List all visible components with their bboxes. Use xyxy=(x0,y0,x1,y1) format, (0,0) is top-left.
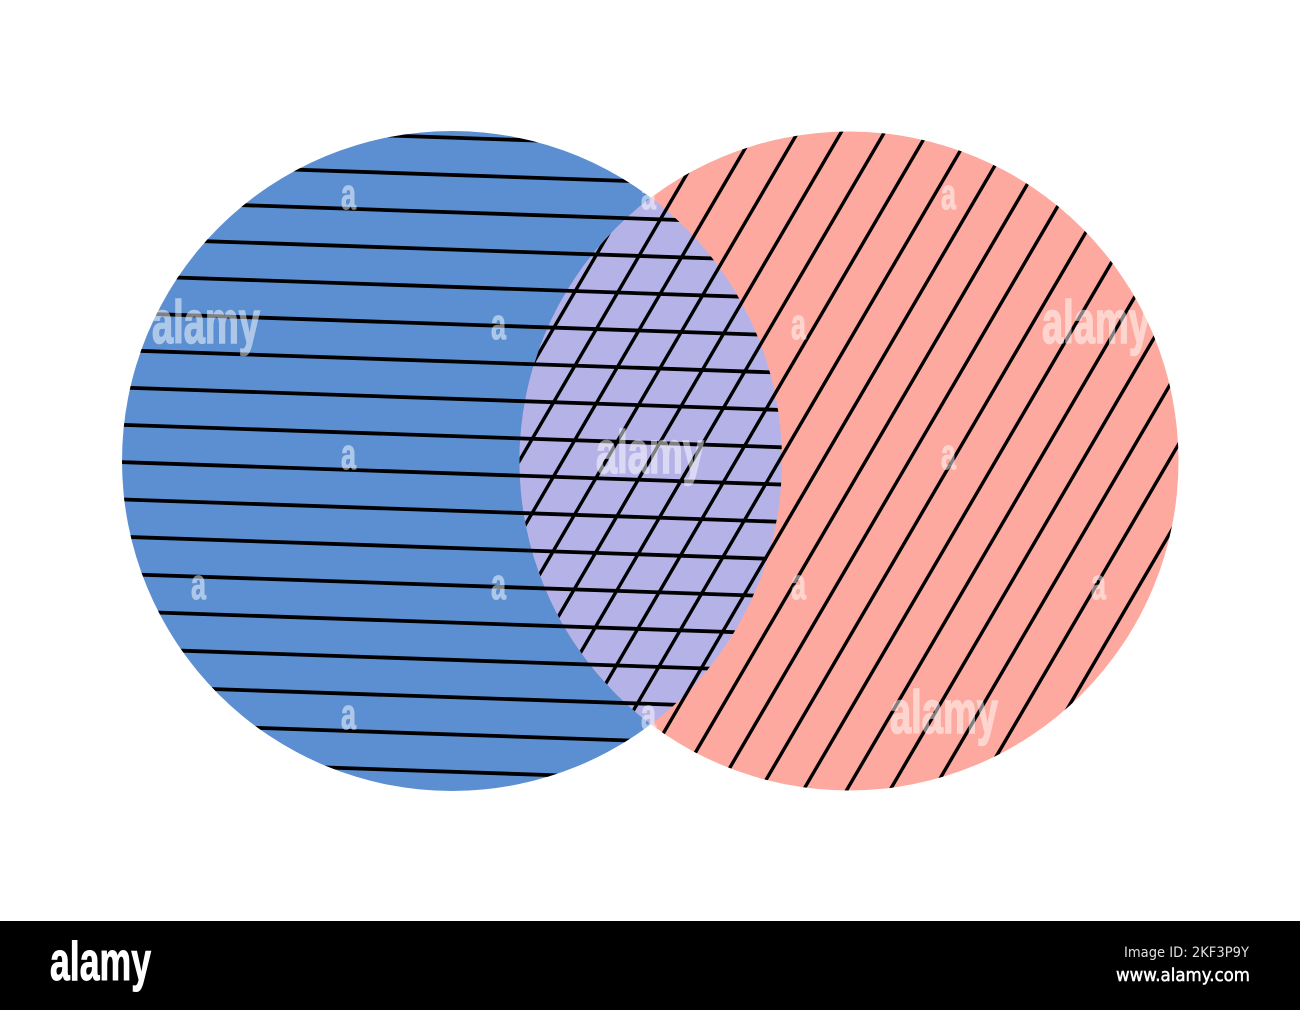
watermarks: a xyxy=(341,170,356,219)
footer bar xyxy=(0,921,1300,1010)
watermarks: a xyxy=(641,170,656,219)
watermarks: alamy xyxy=(596,419,704,486)
right salmon circle xyxy=(520,132,1178,790)
watermarks: alamy xyxy=(152,289,260,356)
left circle horizontal hatch lines xyxy=(100,126,800,784)
watermarks: a xyxy=(341,430,356,479)
watermarks: a xyxy=(641,690,656,739)
watermarks: a xyxy=(941,430,956,479)
watermarks: a xyxy=(341,690,356,739)
watermarks: a xyxy=(941,170,956,219)
overlap lens xyxy=(520,198,782,724)
watermarks: a xyxy=(1091,560,1106,609)
left blue circle xyxy=(122,131,782,791)
watermarks: a xyxy=(191,560,206,609)
watermarks: a xyxy=(491,300,506,349)
watermarks: alamy xyxy=(890,679,998,746)
watermarks: a xyxy=(491,560,506,609)
website: www.alamy.com xyxy=(1116,965,1250,986)
image id: Image ID: 2KF3P9Y xyxy=(1124,945,1249,961)
watermarks: a xyxy=(791,560,806,609)
watermarks xyxy=(152,170,1150,746)
watermarks: alamy xyxy=(1042,289,1150,356)
right circle diagonal hatch lines xyxy=(520,132,1178,790)
footer logo: alamy xyxy=(50,930,151,992)
watermarks: a xyxy=(791,300,806,349)
